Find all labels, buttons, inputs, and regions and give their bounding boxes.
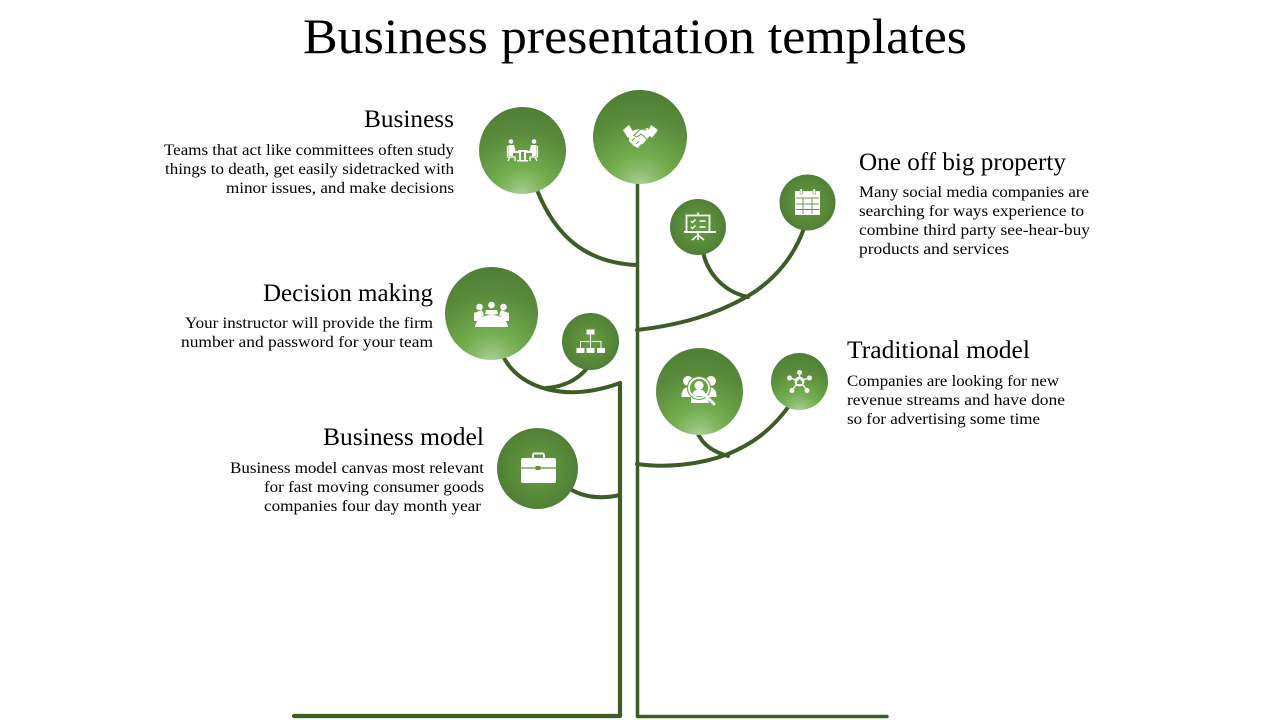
text block: traditional model: Companies are looking for new — [847, 373, 1059, 390]
text block: business model — [230, 424, 485, 515]
tree trunk and ground lines — [294, 180, 887, 716]
branch: decision making — [504, 358, 620, 392]
text block: business model: companies four day month year — [264, 498, 482, 515]
icon: calendar — [795, 189, 820, 215]
text block: one off big property: combine third party see-hear-buy — [859, 222, 1090, 239]
text block: one off big property: products and services — [859, 241, 1009, 258]
node: network — [771, 353, 828, 410]
icon: group around table — [474, 302, 509, 327]
text block: one off big property: Many social media companies are — [859, 184, 1089, 201]
branch: hierarchy twig — [546, 367, 588, 388]
icon: presentation board — [684, 212, 716, 240]
node: handshake — [593, 90, 687, 184]
branch: presentation twig — [703, 252, 748, 297]
branch: one off big property — [637, 228, 804, 330]
node: business model — [497, 428, 578, 509]
icon: briefcase — [521, 454, 556, 483]
text block: business — [164, 106, 454, 197]
text block: decision making: Decision making — [263, 280, 433, 307]
text block: decision making — [181, 280, 434, 351]
text block: business: Business — [364, 106, 454, 133]
icon: people under magnifier — [682, 376, 716, 404]
node: presentation — [670, 199, 726, 255]
node: decision making — [445, 267, 538, 360]
text block: one off big property — [859, 149, 1090, 258]
branch: traditional model — [637, 406, 789, 466]
node: talent search — [656, 348, 743, 435]
text block: business model: Business model — [323, 424, 484, 451]
text block: traditional model: revenue streams and have done — [847, 392, 1065, 409]
node: business meeting — [479, 107, 566, 194]
node: calendar — [780, 174, 836, 230]
icon: organisation chart — [576, 330, 605, 353]
text block: traditional model — [847, 337, 1065, 428]
text block: traditional model: Traditional model — [847, 337, 1030, 364]
text block: business: Teams that act like committees often study — [164, 142, 454, 159]
text block: business: minor issues, and make decisions — [226, 180, 454, 197]
branch: business — [537, 190, 637, 265]
text block: business model: Business model canvas most relevant — [230, 460, 485, 477]
text block: decision making: number and password for your team — [181, 334, 434, 351]
branch: business model — [570, 489, 620, 497]
text block: business: things to death, get easily sidetracked with — [165, 161, 454, 178]
branch: search twig — [698, 434, 728, 456]
text block: one off big property: searching for ways experience to — [859, 203, 1084, 220]
node: hierarchy — [562, 313, 619, 370]
text block: decision making: Your instructor will provide the firm — [185, 315, 434, 332]
title: Business presentation templates — [303, 8, 967, 64]
icon: network hub — [787, 370, 812, 393]
text block: one off big property: One off big property — [859, 149, 1066, 176]
icon: handshake — [623, 125, 658, 148]
text block: business model: for fast moving consumer goods — [264, 479, 484, 496]
text block: traditional model: so for advertising some time — [847, 411, 1040, 428]
icon: two people at table — [508, 139, 538, 162]
